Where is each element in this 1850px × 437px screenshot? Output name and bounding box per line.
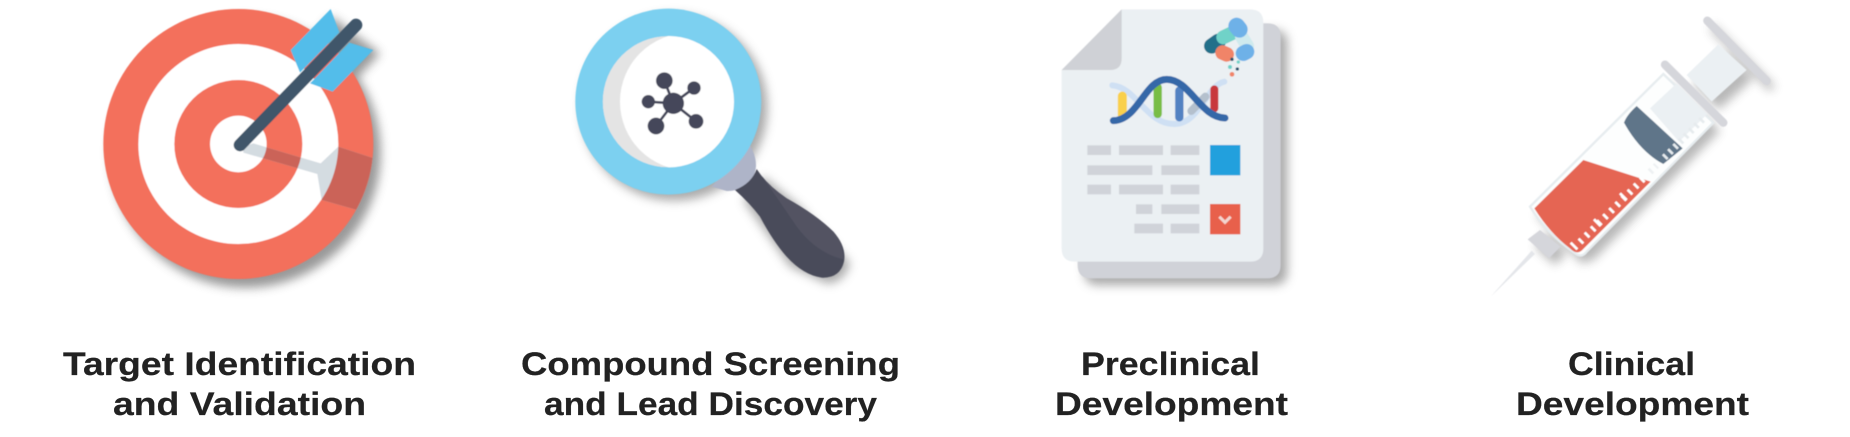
molecule bbox=[642, 72, 703, 134]
lens glass bbox=[602, 35, 735, 168]
label: Preclinical Development bbox=[1055, 346, 1288, 422]
arrow shadow on white rings bbox=[243, 143, 372, 210]
table placeholder bars bbox=[1087, 145, 1199, 233]
nozzle bbox=[1528, 230, 1561, 258]
arrow shadow on red rings bbox=[262, 146, 374, 210]
plunger rod bbox=[1687, 44, 1747, 102]
label: Clinical Development bbox=[1516, 346, 1749, 422]
label: Preclinical Development: Preclinical bbox=[1081, 346, 1260, 382]
back page bbox=[1078, 23, 1281, 278]
red square with chevron bbox=[1210, 204, 1240, 234]
label: Target Identification and Validation: and Validation bbox=[113, 386, 366, 422]
page fold bbox=[1062, 9, 1122, 70]
rubber stopper bbox=[1624, 106, 1683, 164]
label: Compound Screening and Lead Discovery: Compound Screening bbox=[521, 346, 900, 382]
arrow shaft bbox=[240, 25, 356, 145]
icon: target with arrow bbox=[103, 9, 400, 288]
arrow fletching bbox=[291, 9, 373, 92]
icon: document with DNA and pills bbox=[1062, 9, 1287, 285]
label: Compound Screening and Lead Discovery: and Lead Discovery bbox=[544, 386, 877, 422]
label: Clinical Development: Clinical bbox=[1568, 346, 1695, 382]
icon: syringe bbox=[1491, 21, 1775, 297]
label: Preclinical Development: Development bbox=[1055, 386, 1288, 422]
DNA helix bbox=[1112, 79, 1225, 124]
label: Target Identification and Validation bbox=[63, 346, 416, 422]
blue square bbox=[1210, 145, 1240, 175]
barrel bbox=[1530, 74, 1713, 255]
label: Clinical Development: Development bbox=[1516, 386, 1749, 422]
liquid bbox=[1534, 160, 1651, 252]
target rings bbox=[103, 9, 373, 279]
plunger flange bbox=[1707, 21, 1767, 81]
barrel flange bbox=[1665, 65, 1723, 123]
label: Target Identification and Validation: Target Identification bbox=[63, 346, 416, 382]
front page bbox=[1062, 9, 1263, 262]
label: Compound Screening and Lead Discovery bbox=[521, 346, 900, 422]
icon: magnifying glass with molecule bbox=[575, 9, 850, 283]
pills bbox=[1212, 26, 1247, 54]
plunger body bbox=[1650, 83, 1707, 142]
scale ticks bbox=[1571, 118, 1704, 249]
handle bbox=[735, 169, 844, 278]
lens ring bbox=[575, 9, 761, 195]
pill particles bbox=[1228, 58, 1240, 77]
handle collar bbox=[712, 145, 756, 191]
needle bbox=[1491, 251, 1535, 297]
